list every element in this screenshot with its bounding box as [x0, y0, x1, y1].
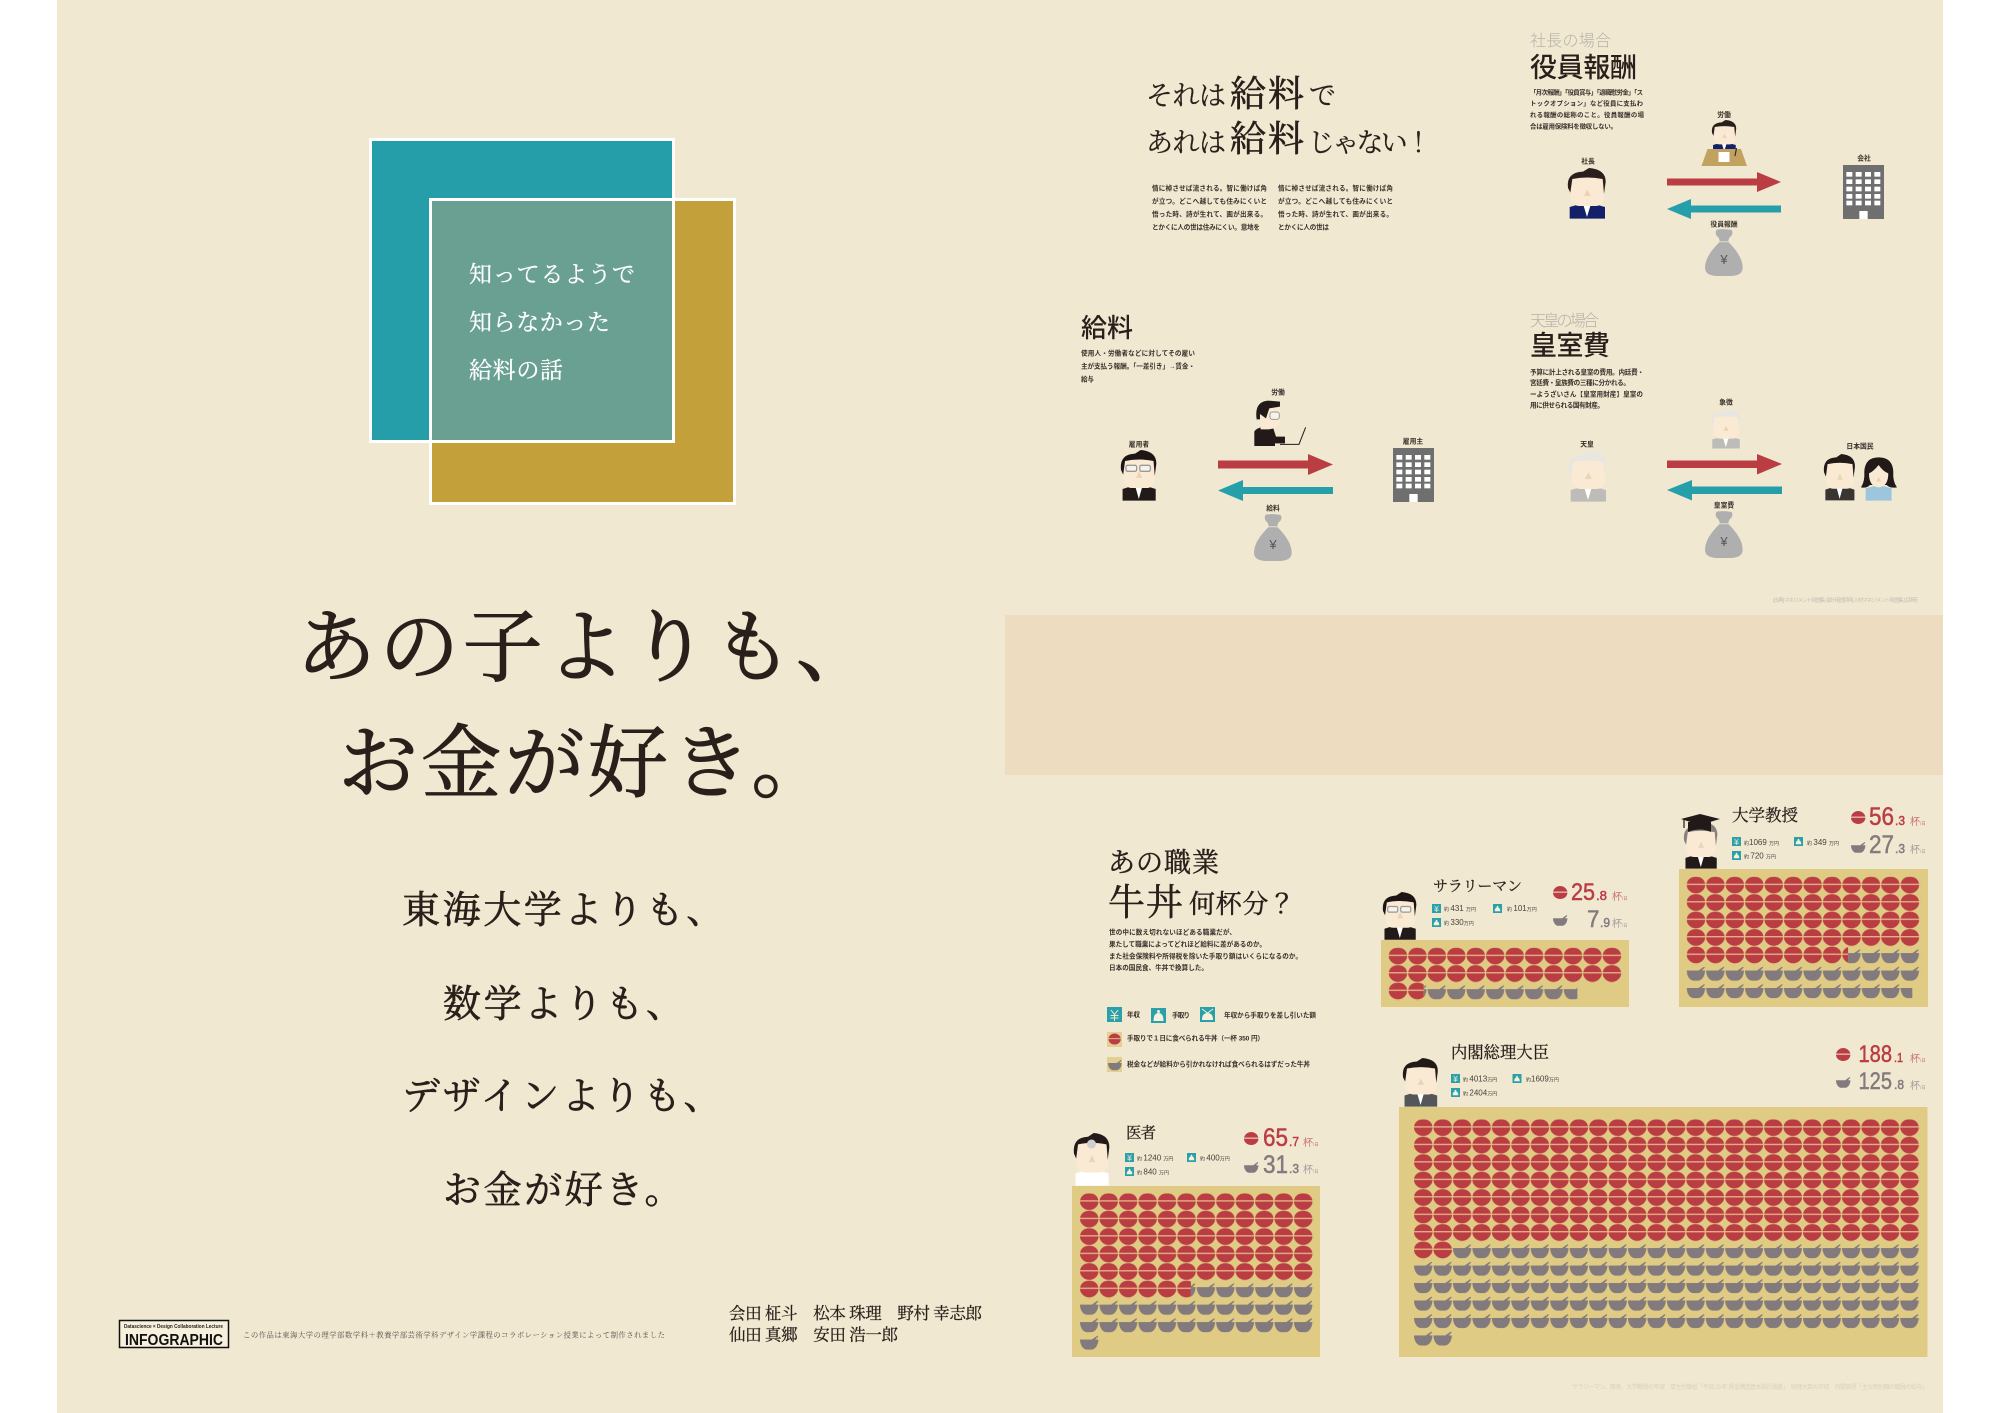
icon: employer building [1393, 448, 1434, 502]
legend [1107, 1007, 1316, 1072]
icon: executive at desk [1702, 120, 1747, 166]
section title: salary or not: あれは [1146, 128, 1226, 158]
gray bowl count: 杯/日 [1910, 843, 1926, 856]
income figures: 約 101万円 [1507, 904, 1537, 913]
label: symbol: 象徴 [1719, 398, 1733, 406]
red bowl count: 杯/日 [1303, 1136, 1319, 1149]
income figures: 約 1240 万円 [1137, 1154, 1173, 1162]
subtitle [469, 262, 635, 383]
description: 使用人・労働者などに対してその雇い [1081, 348, 1195, 358]
bowl chart [1072, 1186, 1320, 1357]
gray bowl count: 杯/日 [1612, 917, 1628, 930]
teal square [370, 140, 674, 442]
description: 宮廷費・皇族費の三種に分かれる。 [1530, 378, 1630, 387]
icon: prime minister [1403, 1058, 1438, 1107]
income figures: 約 431 万円 [1444, 904, 1476, 913]
sub headline [402, 890, 727, 1212]
description: 主が支払う報酬。「一差引き」→賃金・ [1081, 362, 1195, 370]
description: 用に供せられる国有財産。 [1530, 400, 1604, 410]
gyudon section title [1108, 848, 1295, 924]
panel: executive compensation [1530, 32, 1884, 276]
label: pay: 給料 [1266, 504, 1280, 512]
main headline: あの子よりも、 [296, 605, 879, 693]
infographic logo: Datascience × Design Collaboration Lecture [124, 1324, 223, 1330]
red bowl count: .8 [1596, 888, 1607, 903]
income figures: 約1069 万円 [1744, 838, 1779, 847]
icon: company building [1843, 165, 1884, 219]
gray bowl count [1836, 1068, 1926, 1095]
description [1530, 368, 1644, 410]
footer caption: この作品は東海大学の理学部数学科＋教養学部芸術学科デザイン学課程のコラボレーション授業によって制作されました [243, 1330, 665, 1340]
panel: prime minister [1399, 1041, 1928, 1357]
red bowl count: 25 [1571, 879, 1595, 906]
icon: doctor [1074, 1133, 1109, 1186]
intro text: が立つ。どこへ越しても住みにくいと [1152, 196, 1267, 206]
text: red bowl: 手取りで１日に食べられる牛丼（一杯 350 円） [1127, 1034, 1264, 1042]
icon: annual income [1107, 1007, 1122, 1022]
bottom source note: サラリーマン、医者、大学教授の年収 厚生労働省「平成 23 年 賃金構造基本統計調査」 総理大臣の年収 内閣官房「主な特別職の職員の給与」 [1572, 1383, 1928, 1391]
sub headline: 数学よりも、 [443, 984, 687, 1026]
occupation name: 医者 [1126, 1124, 1156, 1142]
icon: red bowl [1107, 1032, 1122, 1047]
label: budget: 皇室費 [1714, 500, 1734, 510]
overlap square [430, 200, 674, 442]
gray bowl count: 27 [1869, 831, 1894, 859]
gray bowl count: 7 [1587, 906, 1600, 933]
intro text: 情に棹させば流される。智に働けば角 [1278, 184, 1393, 192]
intro text: が立つ。どこへ越しても住みにくいと [1278, 196, 1393, 206]
gyudon intro text [1109, 928, 1302, 972]
main headline [296, 605, 879, 809]
icon: employee [1121, 450, 1156, 501]
income figures [1732, 837, 1839, 860]
description: 給与 [1081, 374, 1094, 384]
heading: 役員報酬 [1530, 53, 1637, 83]
icon: professor [1681, 814, 1720, 869]
gyudon section title: あの職業 [1108, 848, 1219, 878]
gyudon intro text: 果たして職業によってどれほど給料に差があるのか。 [1109, 940, 1266, 948]
text: gray bowl: 税金などが給料から引かれなければ食べられるはずだった牛丼 [1127, 1060, 1310, 1068]
sub headline: デザインよりも、 [402, 1076, 724, 1118]
icon: money bag: ¥ [1719, 252, 1728, 267]
heading: 皇室費 [1530, 331, 1610, 361]
panel: imperial household [1530, 312, 1919, 604]
panel: doctor [1072, 1124, 1320, 1357]
description: れる報酬の総称のこと。役員報酬の場 [1530, 110, 1645, 119]
icon: citizens [1824, 454, 1897, 501]
arrow: pay [1667, 199, 1781, 219]
subtitle: 知らなかった [469, 310, 610, 335]
subtitle: 知ってるようで [469, 262, 635, 287]
icon: emperor [1569, 451, 1607, 502]
label: labor: 労働 [1271, 388, 1285, 396]
income figures [1125, 1153, 1230, 1176]
label: company: 会社 [1857, 154, 1871, 162]
icon: money bag: ¥ [1268, 537, 1277, 552]
section title: salary or not: 給料 [1230, 119, 1304, 159]
gray bowl count: 31 [1263, 1151, 1288, 1179]
description: トックオプション」など役員に支払わ [1530, 98, 1644, 108]
panel: salaryman [1381, 879, 1629, 1007]
intro text: 情に棹させば流される。智に働けば角 [1152, 184, 1267, 192]
icon: take home [1151, 1008, 1166, 1023]
gray bowl count [1244, 1151, 1319, 1179]
icon: money bag: ¥ [1719, 534, 1728, 549]
subtitle: 給料の話 [469, 358, 563, 383]
gray bowl count [1851, 831, 1926, 859]
income figures: 約 349 万円 [1807, 838, 1839, 847]
income figures: 約 330万円 [1444, 918, 1474, 927]
description [1081, 348, 1195, 384]
arrow: labor [1218, 454, 1333, 475]
red bowl count [1836, 1041, 1926, 1068]
intro text: 悟った時、詩が生れて、画が出来る。 [1152, 210, 1267, 218]
gray bowl count: .8 [1894, 1077, 1904, 1092]
section title: salary or not: 給料 [1230, 74, 1304, 114]
icon: gray bowl [1107, 1057, 1122, 1072]
income figures: 約1609万円 [1526, 1074, 1559, 1084]
description [1530, 88, 1645, 130]
gyudon section title: 牛丼 [1108, 882, 1183, 924]
label: employee: 雇用者 [1129, 440, 1149, 448]
red bowl count [1553, 879, 1628, 906]
case label: 社長の場合 [1530, 32, 1611, 50]
section title: salary or not [1146, 74, 1432, 159]
authors [729, 1304, 982, 1344]
icon: president [1568, 168, 1606, 219]
occupation name: 内閣総理大臣 [1451, 1043, 1549, 1062]
section title: salary or not: で [1309, 81, 1336, 111]
label: labor: 労働 [1717, 110, 1731, 119]
income figures [1451, 1074, 1559, 1098]
income figures: 約 720 万円 [1744, 852, 1776, 860]
description: 予算に計上される皇室の費用。内廷費・ [1530, 368, 1644, 376]
icon: money bag [1254, 514, 1292, 561]
gyudon intro text: 日本の国民食、牛丼で換算した。 [1109, 963, 1208, 972]
text: annual income: 年収 [1127, 1010, 1140, 1019]
panel: salary [1081, 313, 1434, 561]
income figures: 約 840 万円 [1137, 1168, 1169, 1176]
label: president: 社長 [1581, 156, 1595, 166]
source note: (出典) マネジメント用語集, 会計用語辞典, 人材マネジメント用語集, 広辞苑 [1773, 596, 1919, 604]
gray bowl count: .3 [1289, 1161, 1299, 1176]
authors: 仙田 真郷 安田 浩一郎 [729, 1326, 898, 1344]
gray bowl count: .3 [1895, 841, 1905, 856]
gray bowl count [1553, 906, 1628, 933]
red bowl count [1244, 1124, 1319, 1152]
arrow: labor [1667, 172, 1781, 192]
description: 「月次報酬」「役員賞与」「退職慰労金」「ス [1530, 88, 1643, 96]
bowl chart [1679, 869, 1928, 1007]
red bowl count: 56 [1869, 803, 1894, 831]
red bowl count: 杯/日 [1612, 890, 1628, 903]
gray bowl count: 125 [1858, 1068, 1892, 1095]
label: employer: 雇用主 [1403, 436, 1423, 446]
gray bowl count: 杯/日 [1303, 1163, 1319, 1176]
label: emperor: 天皇 [1580, 440, 1594, 448]
text: take home: 手取り [1172, 1010, 1190, 1020]
bowl chart [1381, 940, 1629, 1007]
income figures: 約 2404万円 [1463, 1088, 1497, 1098]
occupation name: 大学教授 [1732, 806, 1798, 825]
red bowl count: 65 [1263, 1124, 1288, 1152]
red bowl count: 杯/日 [1910, 815, 1926, 828]
case label: 天皇の場合 [1530, 312, 1599, 330]
text: difference: 年収から手取りを差し引いた額 [1224, 1010, 1316, 1020]
section title: salary or not: じゃない！ [1308, 128, 1432, 158]
icon: emperor small [1711, 409, 1740, 449]
infographic logo [120, 1320, 228, 1349]
icon: money bag [1705, 229, 1743, 276]
description: 合は雇用保険料を徴収しない。 [1530, 122, 1617, 130]
cover squares with subtitle [370, 140, 734, 504]
sub headline: お金が好き。 [443, 1170, 685, 1212]
red bowl count: 188 [1858, 1041, 1892, 1068]
income figures [1432, 904, 1537, 927]
section title: salary or not: それは [1146, 81, 1226, 111]
gray bowl count: 杯/日 [1910, 1079, 1926, 1092]
icon: salaryman [1383, 892, 1416, 940]
red bowl count: 杯/日 [1910, 1052, 1926, 1065]
icon: difference [1200, 1007, 1215, 1022]
intro text [1152, 184, 1393, 232]
heading: 給料 [1081, 313, 1133, 343]
label: citizens: 日本国民 [1846, 442, 1874, 450]
red bowl count: .1 [1894, 1050, 1903, 1065]
arrow: symbol [1667, 454, 1782, 474]
arrow: money [1667, 480, 1782, 500]
intro text: とかくに人の世は [1278, 222, 1329, 232]
red bowl count: .7 [1289, 1134, 1299, 1149]
sub headline: 東海大学よりも、 [402, 890, 727, 932]
income figures: 約 400万円 [1200, 1154, 1230, 1162]
icon: money bag [1705, 511, 1743, 558]
bowl chart [1399, 1107, 1928, 1357]
red bowl count [1851, 803, 1926, 831]
label: compensation: 役員報酬 [1710, 220, 1738, 228]
description: ーようざいさん【皇室用財産】皇室の [1530, 390, 1643, 398]
authors: 会田 柾斗 松本 珠理 野村 幸志郎 [729, 1304, 982, 1323]
gyudon intro text: また社会保険料や所得税を除いた手取り額はいくらになるのか。 [1109, 952, 1302, 960]
main headline: お金が好き。 [338, 721, 835, 809]
occupation name: サラリーマン [1433, 879, 1522, 895]
panel: professor [1679, 803, 1928, 1007]
income figures: 約 4013万円 [1463, 1074, 1497, 1084]
gyudon section title: 何杯分？ [1189, 890, 1295, 919]
gyudon intro text: 世の中に数え切れないほどある職業だが、 [1109, 928, 1236, 936]
pink band [1005, 615, 1943, 775]
red bowl count: .3 [1895, 813, 1905, 828]
arrow: pay [1218, 480, 1333, 501]
gold square [430, 200, 734, 504]
intro text: 悟った時、詩が生れて、画が出来る。 [1278, 210, 1393, 218]
infographic logo: INFOGRAPHIC [125, 1332, 223, 1349]
gray bowl count: .9 [1600, 915, 1610, 930]
intro text: とかくに人の世は住みにくい。意地を [1152, 222, 1260, 232]
icon: worker with laptop [1254, 401, 1306, 446]
